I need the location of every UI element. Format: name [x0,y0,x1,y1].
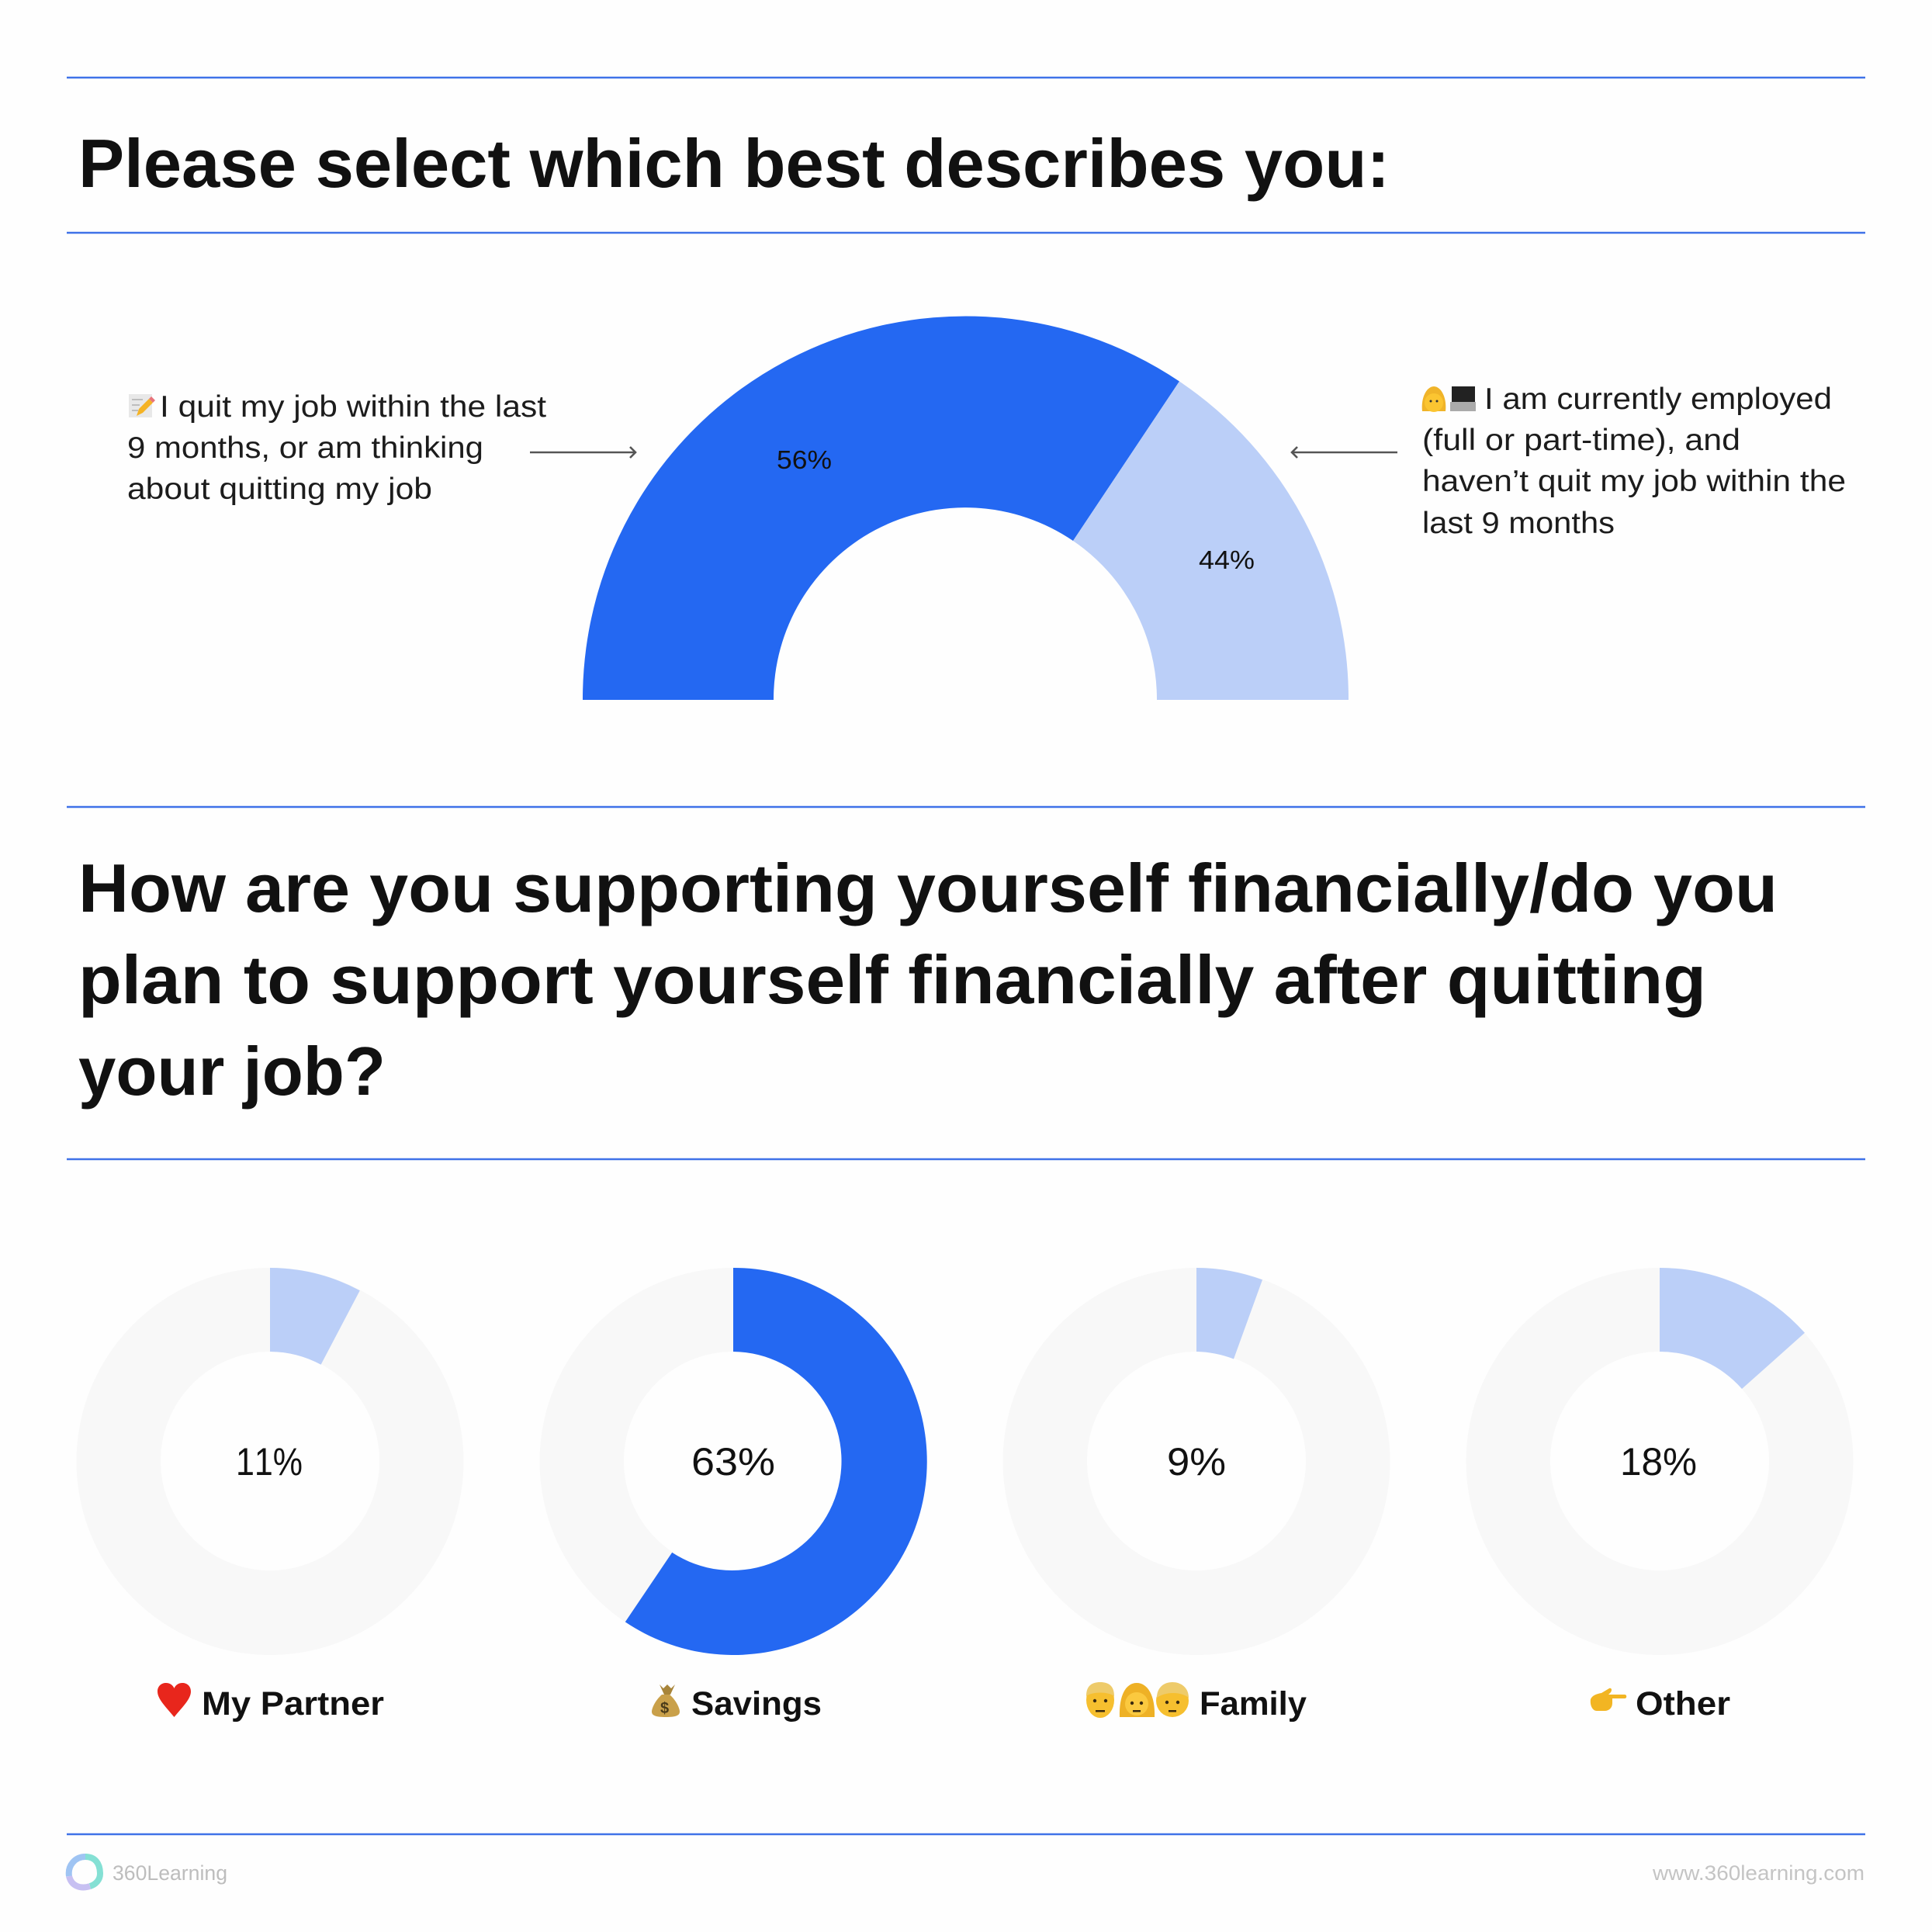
callout: quit my job [127,390,546,506]
panel: donut savings [540,1268,927,1723]
segment: 44 percent [1073,382,1349,700]
text: currently employed: I am currently employed [1484,383,1832,416]
value: 18% [1620,1440,1697,1484]
text: currently employed: last 9 months [1422,507,1615,540]
icon: memo and pencil [129,394,155,417]
arrow: pointing right to chart [530,447,635,458]
heading: second question: plan to support yourself financially after quitting [78,941,1706,1018]
logo wordmark: 360Learning [113,1861,227,1885]
label: savings: Savings [691,1685,822,1723]
icon: family faces [1086,1682,1189,1718]
icon: woman with laptop [1422,386,1476,412]
panel: donut family [1003,1268,1390,1723]
text: quit my job: 9 months, or am thinking [127,431,483,465]
text: currently employed [1422,383,1846,540]
value: 63% [691,1440,775,1484]
half donut chart [583,316,1349,700]
text: currently employed: (full or part-time), and [1422,424,1740,457]
donut segment [1196,1268,1262,1359]
text: quit my job: I quit my job within the last [160,390,546,424]
panel: donut my partner [77,1268,464,1723]
value: 11% [236,1440,303,1484]
text: quit my job: about quitting my job [127,473,432,506]
footer url: www.360learning.com [1652,1861,1864,1885]
heading: second question: your job? [78,1033,386,1110]
heading: second question: How are you supporting yourself financially/do you [78,850,1778,926]
heading: second question [78,850,1778,1110]
donut track [540,1268,927,1655]
panel: donut other [1466,1268,1854,1723]
donut track [1003,1268,1390,1655]
donut segment [625,1268,927,1655]
text: currently employed: haven’t quit my job within the [1422,465,1846,498]
panel: half donut chart section [127,316,1846,700]
icon: pointing hand [1591,1688,1626,1711]
label: other: Other [1636,1685,1730,1723]
label: family [1086,1682,1307,1723]
label: other [1591,1685,1730,1723]
heading: first question: Please select which best describes you: [78,125,1390,202]
value: 9% [1167,1440,1226,1484]
donut track [1466,1268,1854,1655]
text: quit my job [127,390,546,506]
donut track [77,1268,464,1655]
donut segment [270,1268,360,1365]
segment: 56 percent [583,316,1179,700]
footer logo [69,1857,227,1887]
value: 56%: 56% [777,445,832,474]
icon: money bag [652,1684,680,1717]
arrow: pointing left to chart [1292,447,1397,458]
label: my partner: My Partner [202,1685,384,1723]
icon: ring logo [69,1857,100,1887]
icon: money bag: $ [660,1700,669,1717]
donut segment [1660,1268,1805,1389]
icon: heart [158,1683,191,1717]
value: 44%: 44% [1199,545,1255,574]
label: family: Family [1200,1685,1307,1723]
callout: currently employed [1422,383,1846,540]
